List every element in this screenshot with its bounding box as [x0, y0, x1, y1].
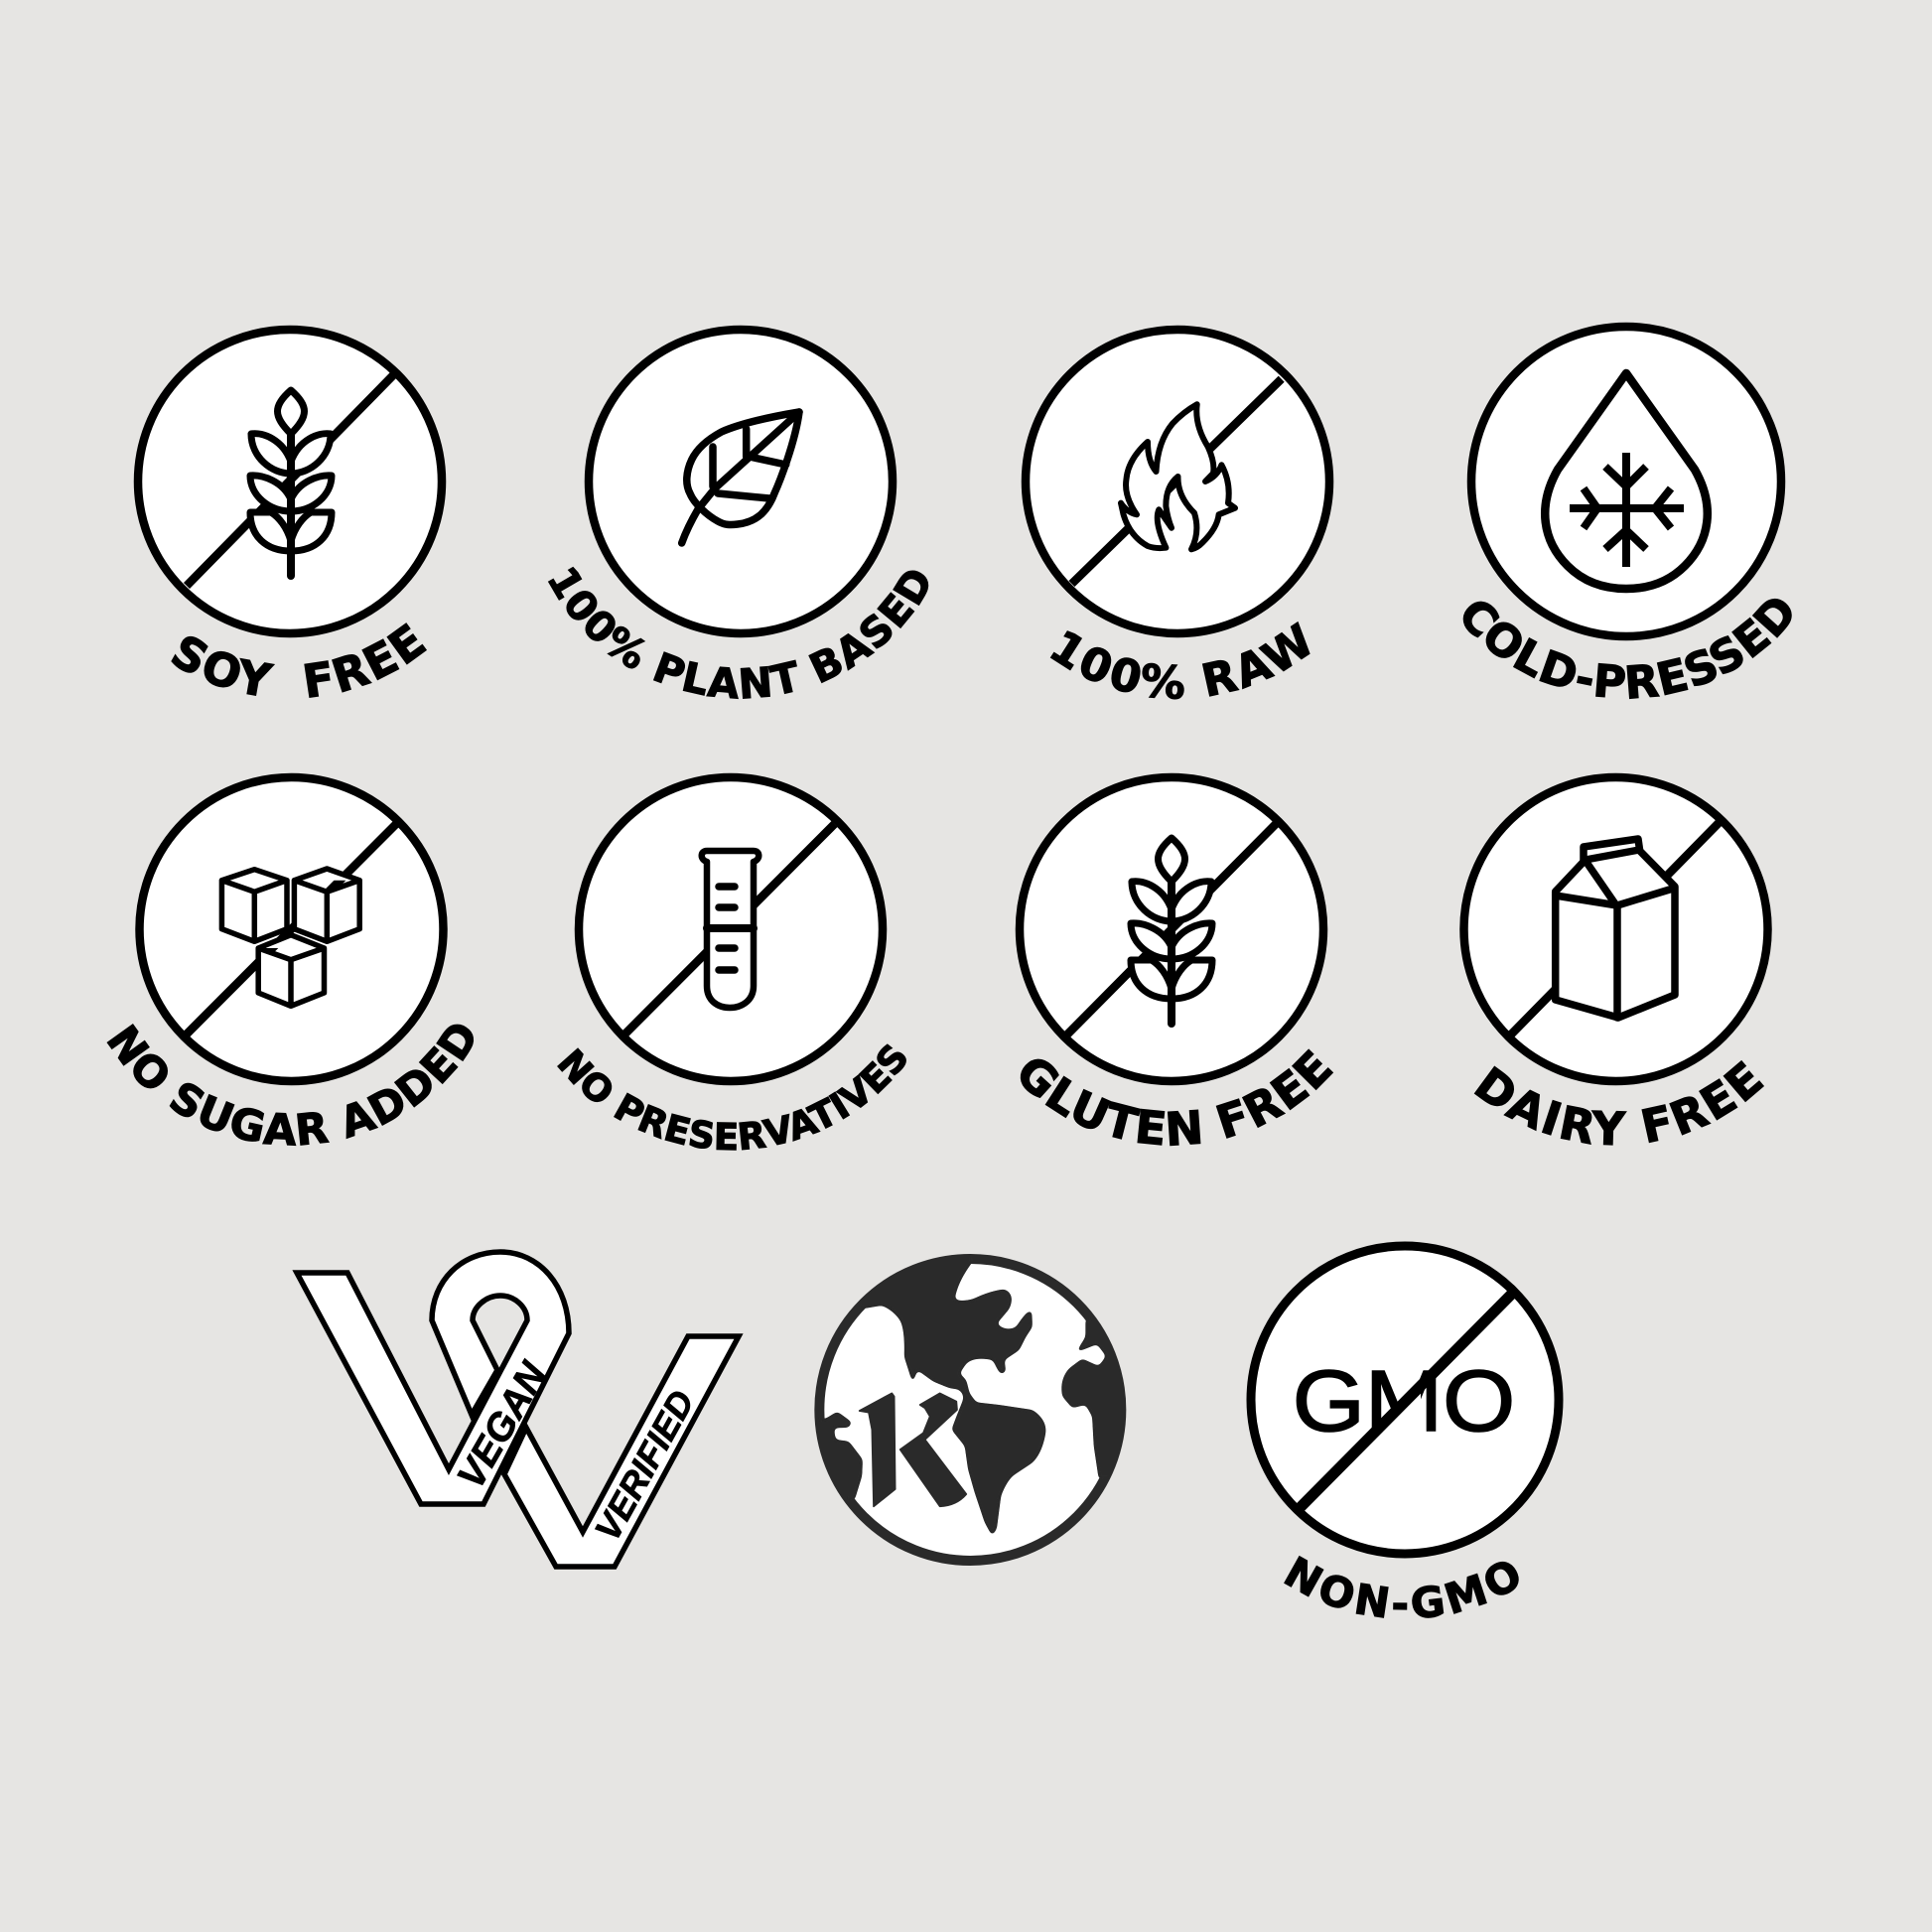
badge: no preservatives [557, 772, 906, 1151]
label: no sugar added: NO SUGAR ADDED [107, 1024, 475, 1146]
badge: 100% raw [1021, 326, 1334, 699]
label: vegan: VEGAN [450, 1354, 556, 1496]
label: soy free: SOY FREE [171, 622, 427, 698]
globe disc [819, 1259, 1121, 1561]
badge: soy free [133, 326, 447, 698]
icon: flame [1121, 404, 1235, 549]
circle with slash [1463, 777, 1767, 1081]
icon: sugar cubes [221, 869, 359, 1006]
badge: dairy free [1459, 772, 1772, 1146]
badge: cold-pressed [1463, 322, 1792, 699]
land: africa [1061, 1313, 1139, 1479]
icon: milk carton [1556, 839, 1675, 1018]
circle with slash [139, 777, 443, 1081]
circle with slash [1026, 330, 1329, 633]
circle with slash [579, 777, 883, 1081]
word: GMO: GMO [1293, 1353, 1515, 1449]
badge: no sugar added [107, 772, 475, 1146]
badge: non-gmo [1247, 1241, 1563, 1618]
badge: kosher globe [807, 1244, 1139, 1561]
circle with slash [1020, 777, 1323, 1081]
icon: snowflake [1570, 453, 1684, 567]
land: north and south america [866, 1264, 1046, 1533]
label: dairy free: DAIRY FREE [1473, 1060, 1764, 1146]
icon: leaf [682, 412, 799, 543]
circle [1251, 1246, 1559, 1554]
label: no preservatives: NO PRESERVATIVES [557, 1043, 906, 1151]
icon: wheat [250, 390, 332, 576]
land: left edge [807, 1412, 863, 1501]
icon: droplet [1545, 373, 1708, 589]
badge: 100% plant based [548, 326, 929, 699]
letter mark: K [860, 1393, 966, 1506]
label: verified: VERIFIED [587, 1383, 702, 1548]
label: 100% plant based: 100% PLANT BASED [548, 566, 929, 699]
label: 100% raw: 100% RAW [1050, 621, 1311, 699]
label: cold-pressed: COLD-PRESSED [1463, 598, 1792, 699]
icon: test tube [702, 851, 759, 1008]
icon: first V ribbon with loop [297, 1252, 569, 1504]
label: non-gmo: NON-GMO [1284, 1555, 1519, 1618]
circle [1471, 327, 1781, 636]
badge: gluten free [1015, 772, 1334, 1146]
circle [589, 330, 893, 633]
badge: vegan verified [297, 1252, 739, 1567]
circle with slash [138, 330, 442, 633]
land masses [824, 1264, 1116, 1533]
slash [1299, 1294, 1512, 1509]
icon: wheat [1131, 838, 1212, 1024]
icon: second V ribbon [504, 1336, 739, 1567]
label: gluten free: GLUTEN FREE [1021, 1048, 1334, 1146]
